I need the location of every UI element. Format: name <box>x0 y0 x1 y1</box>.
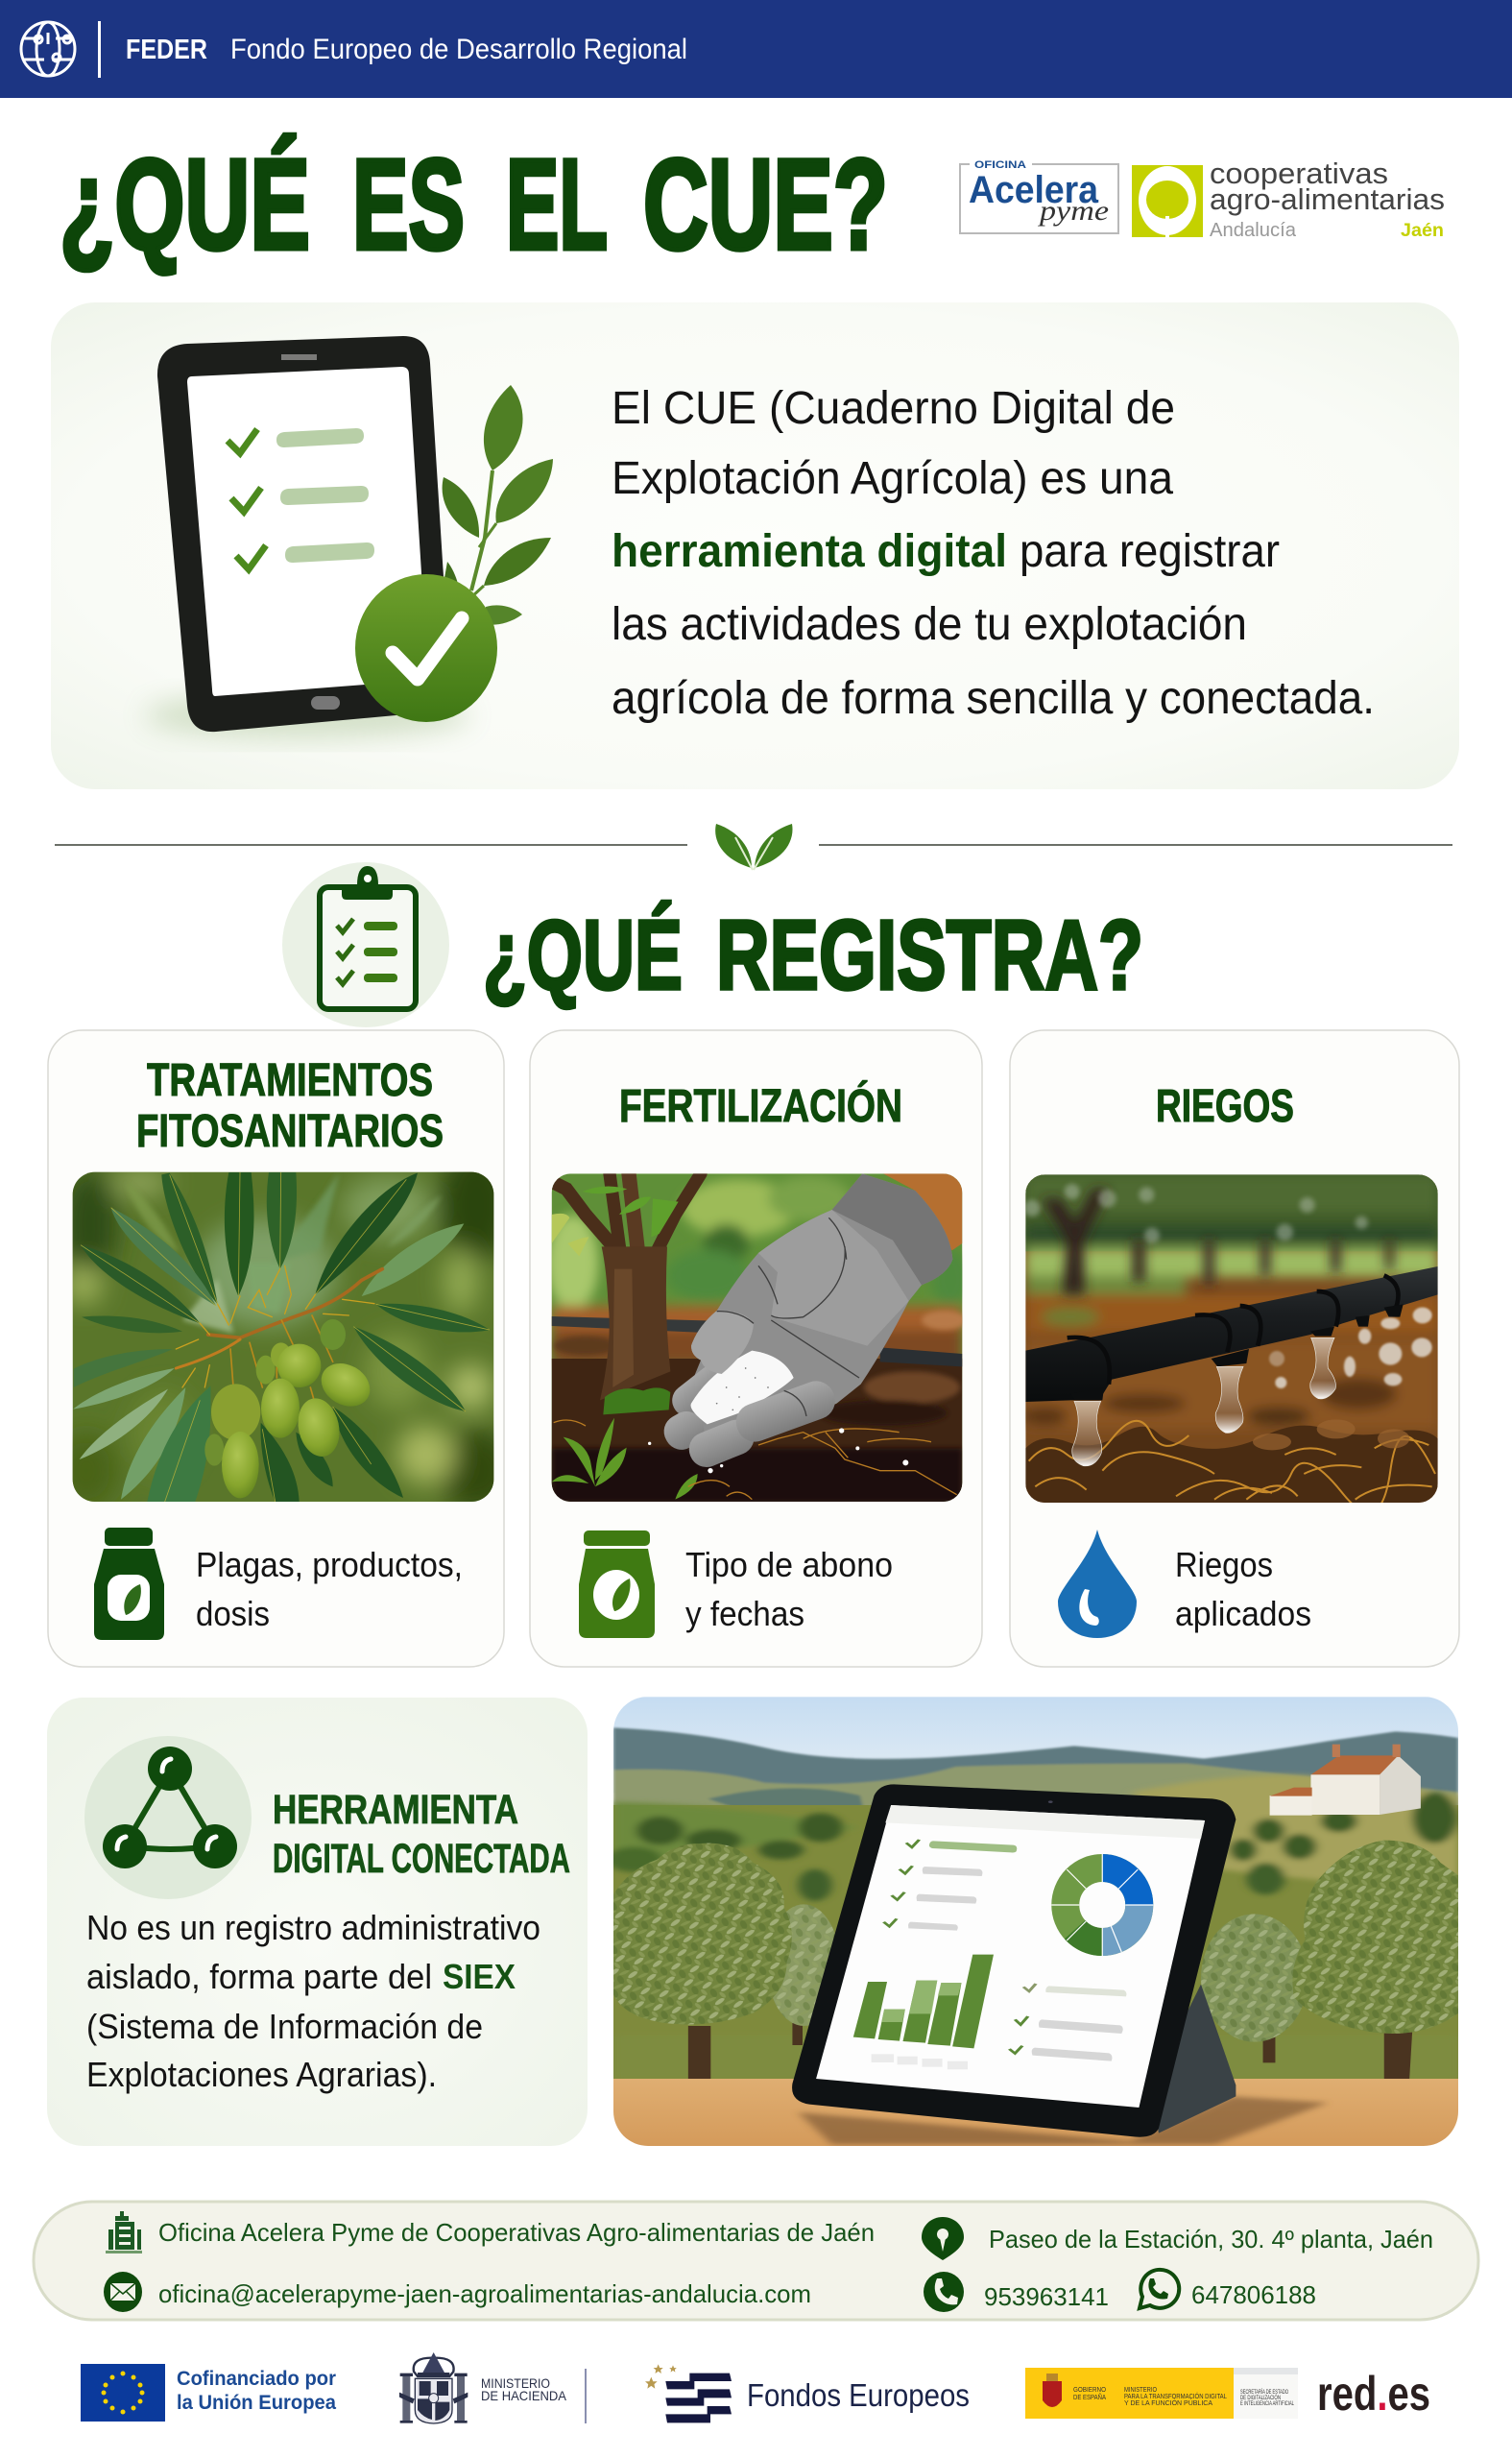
icon: coat of arms <box>399 2352 468 2423</box>
card text: y fechas <box>685 1594 804 1633</box>
section heading: REGISTRA? <box>716 900 1143 1010</box>
logo: Oficina Acelera Pyme <box>960 159 1118 233</box>
card title: TRATAMIENTOS <box>147 1055 433 1106</box>
card text: Riegos <box>1175 1545 1273 1584</box>
section heading: ¿QUÉ <box>483 900 683 1010</box>
water drops <box>1072 1337 1335 1466</box>
photo: drip irrigation <box>1022 1174 1438 1512</box>
panel: herramienta digital conectada <box>47 1698 588 2146</box>
paragraph <box>612 383 1375 724</box>
logo: Ministerio de Hacienda: DE HACIENDA <box>481 2388 567 2403</box>
icon: water drop <box>1058 1530 1137 1638</box>
title: ES <box>352 133 465 277</box>
paragraph: agrícola de forma sencilla y conectada. <box>612 673 1375 724</box>
logo: Cooperativas Agro-alimentarias: Jaén <box>1401 221 1444 241</box>
logo: EU co-financing <box>81 2364 336 2422</box>
bar chart <box>853 1955 994 2048</box>
title: CUE? <box>643 133 888 277</box>
logo: Gobierno de España, Ministerio: PARA LA TRANSFORMACIÓN DIGITAL <box>1124 2392 1227 2400</box>
paragraph: las actividades de tu explotación <box>612 599 1247 650</box>
card title: FERTILIZACIÓN <box>619 1079 902 1132</box>
logo: EU co-financing: Cofinanciado por <box>177 2368 336 2390</box>
photo: gloved hand with fertilizer <box>547 1173 970 1503</box>
card title: RIEGOS <box>1156 1081 1294 1132</box>
wooden table <box>613 2079 1458 2148</box>
card text: aplicados <box>1175 1594 1311 1633</box>
paragraph: para registrar <box>1020 526 1280 577</box>
olive trees <box>613 1841 1458 2079</box>
icon: whatsapp <box>1140 2270 1179 2308</box>
email: oficina@acelerapyme-jaen-agroalimentarias-andalucia.com <box>158 2279 811 2308</box>
panel paragraph: aislado, forma parte del <box>86 1957 432 1996</box>
icon: location pin <box>922 2217 964 2260</box>
logo: Fondos Europeos <box>645 2364 970 2422</box>
roots <box>554 1420 957 1500</box>
fingers <box>665 1359 736 1423</box>
panel paragraph <box>86 1908 540 2094</box>
panel paragraph: Explotaciones Agrarias). <box>86 2055 437 2094</box>
leaves <box>440 385 553 625</box>
logo: Gobierno de España, Ministerio: GOBIERNO <box>1073 2387 1106 2394</box>
card text: dosis <box>196 1594 270 1633</box>
logo: Gobierno de España, Ministerio: MINISTERIO <box>1124 2387 1157 2394</box>
panel heading: HERRAMIENTA <box>273 1787 518 1833</box>
logo: Ministerio de Hacienda: MINISTERIO <box>481 2375 550 2391</box>
logo: Cooperativas Agro-alimentarias <box>1132 157 1445 241</box>
icon: bottle <box>94 1528 164 1640</box>
card title: FITOSANITARIOS <box>136 1106 444 1157</box>
organization name: Oficina Acelera Pyme de Cooperativas Agro-alimentarias de Jaén <box>158 2218 875 2247</box>
phone number: 953963141 <box>984 2282 1109 2311</box>
background leaves <box>127 1173 442 1333</box>
logo: red.es: red.es <box>1317 2367 1430 2421</box>
card text <box>685 1545 893 1633</box>
card: tratamientos fitosanitarios <box>48 1030 516 1667</box>
logo: Ministerio de Hacienda <box>399 2352 587 2423</box>
card: fertilizacion <box>530 1030 982 1667</box>
title <box>60 133 888 277</box>
leaf midribs <box>81 1172 490 1502</box>
panel heading <box>273 1787 570 1882</box>
card text: Tipo de abono <box>685 1545 893 1584</box>
icon: network nodes <box>84 1736 252 1899</box>
foreground leaves <box>161 1173 218 1304</box>
whatsapp number: 647806188 <box>1191 2280 1316 2309</box>
logo: EU co-financing: la Unión Europea <box>177 2392 336 2414</box>
panel paragraph: (Sistema de Información de <box>86 2007 483 2046</box>
logo: Cooperativas Agro-alimentarias: Andalucía <box>1210 220 1297 241</box>
logo: Fondos Europeos: Fondos Europeos <box>747 2377 970 2413</box>
address: Paseo de la Estación, 30. 4º planta, Jaén <box>989 2225 1433 2253</box>
card text <box>196 1545 463 1633</box>
panel paragraph: SIEX <box>443 1957 516 1996</box>
title: EL <box>506 133 608 277</box>
photo: olive branch <box>73 1171 493 1502</box>
icon: phone <box>924 2272 964 2312</box>
paragraph: herramienta digital <box>612 526 1007 577</box>
seedlings <box>552 1387 698 1500</box>
card title <box>136 1055 444 1157</box>
title: ¿QUÉ <box>60 133 310 277</box>
logo: Gobierno de España, Ministerio: DE DIGITALIZACIÓN <box>1240 2395 1281 2401</box>
card: riegos <box>1010 1030 1459 1667</box>
card text <box>1175 1545 1311 1633</box>
olives <box>320 1319 346 1350</box>
card text: Plagas, productos, <box>196 1545 463 1584</box>
icon: building <box>106 2211 142 2253</box>
contact bar <box>34 2202 1478 2320</box>
tablet <box>792 1784 1236 2137</box>
icon: leaf divider <box>715 824 793 870</box>
section icon: clipboard <box>282 862 449 1027</box>
FEDER label: FEDER <box>126 35 207 65</box>
icon: fertilizer bottle <box>579 1530 655 1638</box>
paragraph: Explotación Agrícola) es una <box>612 453 1173 504</box>
branch <box>175 1265 384 1399</box>
logo: Gobierno de España, Ministerio: Y DE LA FUNCIÓN PÚBLICA <box>1124 2398 1212 2407</box>
logo: Oficina Acelera Pyme: Acelera <box>969 169 1099 211</box>
icon: phone with checklist and leaves <box>144 336 553 738</box>
logo: Gobierno de España, Ministerio: SECRETARÍA DE ESTADO <box>1240 2389 1288 2396</box>
panel: what is the CUE <box>51 302 1459 789</box>
fertilizer granules <box>691 1351 794 1424</box>
logo: Gobierno de España, Ministerio <box>1025 2368 1298 2419</box>
tree <box>554 1173 701 1263</box>
pipe <box>1025 1266 1438 1402</box>
panel paragraph: No es un registro administrativo <box>86 1908 540 1947</box>
donut chart <box>1051 1854 1153 1956</box>
panel heading: DIGITAL CONECTADA <box>273 1836 570 1882</box>
icon: globe <box>21 22 75 76</box>
paragraph: El CUE (Cuaderno Digital de <box>612 383 1175 434</box>
photo: tablet in olive grove <box>607 1697 1458 2148</box>
soil lines <box>1025 1426 1438 1503</box>
farmhouse <box>1270 1745 1421 1816</box>
section heading <box>483 900 1143 1010</box>
arm and glove <box>883 1173 962 1250</box>
icon: envelope <box>104 2272 142 2312</box>
header bar <box>0 0 1512 98</box>
checklist <box>228 429 266 569</box>
logo: Gobierno de España, Ministerio: E INTELIGENCIA ARTIFICIAL <box>1240 2401 1294 2407</box>
trees <box>1042 1189 1393 1294</box>
logo: Oficina Acelera Pyme: OFICINA <box>974 159 1026 171</box>
logo: Cooperativas Agro-alimentarias: agro-alimentarias <box>1210 182 1445 216</box>
dashboard checks and bars <box>884 1840 1036 2054</box>
logo: Gobierno de España, Ministerio: DE ESPAÑA <box>1073 2393 1106 2401</box>
logo: Oficina Acelera Pyme: pyme <box>1038 195 1109 227</box>
header text: Fondo Europeo de Desarrollo Regional <box>230 34 687 65</box>
logo: Cooperativas Agro-alimentarias: cooperativas <box>1210 157 1388 190</box>
